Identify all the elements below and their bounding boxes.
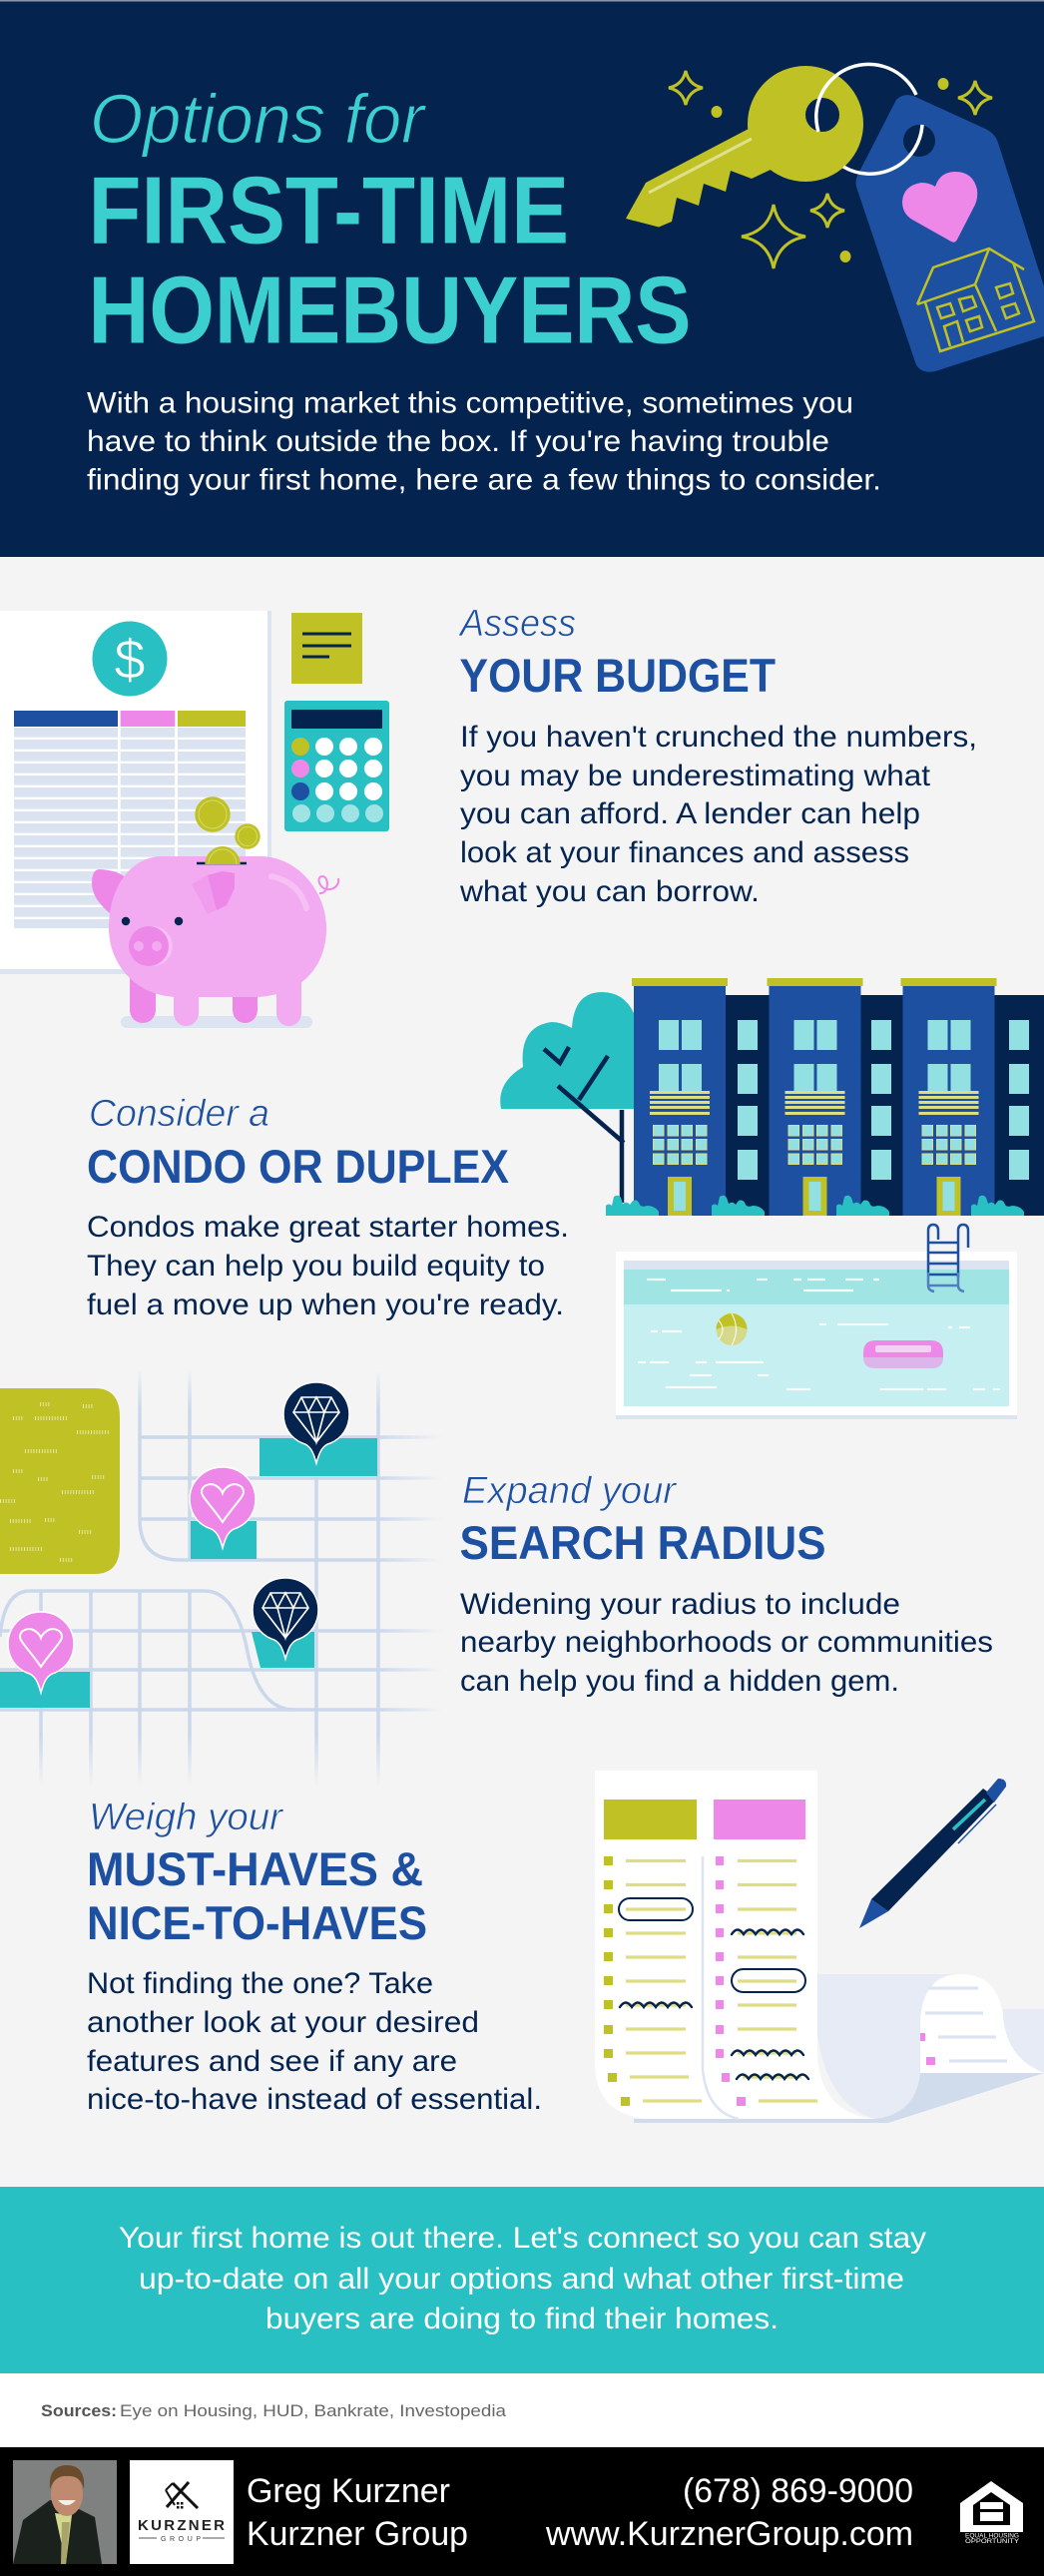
icon: key	[626, 66, 863, 228]
illustration: pool	[616, 1225, 1017, 1419]
sources text: Eye on Housing, HUD, Bankrate, Investopedia	[120, 2401, 507, 2420]
title: options for: Options for	[90, 80, 427, 158]
intro text	[87, 387, 881, 497]
heading: your budget: YOUR BUDGET	[459, 649, 776, 702]
icon: pen	[859, 1779, 1006, 1928]
body text: search: can help you find a hidden gem.	[460, 1665, 899, 1698]
body text: must-haves: features and see if any are	[87, 2045, 457, 2078]
icon: pool float	[863, 1340, 943, 1368]
agent name: Kurzner Group	[247, 2515, 468, 2553]
agent name	[247, 2472, 468, 2553]
icon: key ring	[816, 64, 922, 174]
body text: budget: look at your finances and assess	[460, 836, 909, 869]
illustration: neighborhood map	[0, 1370, 444, 1787]
icon: tree	[500, 992, 634, 1203]
icon: ladder	[928, 1225, 968, 1291]
curled page lines	[920, 1988, 1007, 2065]
body text: budget: If you haven't crunched the numbers,	[460, 721, 977, 754]
bushes	[606, 1196, 1024, 1216]
call to action text: up-to-date on all your options and what other first-time	[139, 2263, 904, 2296]
agent name: Greg Kurzner	[247, 2472, 450, 2510]
body text: must-haves: Not finding the one? Take	[87, 1967, 433, 2000]
heading: condo or duplex: CONDO OR DUPLEX	[87, 1140, 509, 1193]
body text: budget: you can afford. A lender can help	[460, 797, 920, 830]
map: park block	[0, 1388, 120, 1574]
icon: pin with diamond	[253, 1578, 318, 1659]
heading: expand your: Expand your	[462, 1470, 677, 1512]
logo mark	[166, 2482, 198, 2509]
icon: equal housing opportunity	[960, 2481, 1023, 2545]
heading: must-haves: MUST-HAVES &	[87, 1842, 423, 1895]
body text: must-haves	[87, 1967, 542, 2116]
illustration: budget sheet	[0, 611, 271, 974]
illustration: condo building	[500, 978, 1044, 1216]
title: first-time: FIRST-TIME	[88, 158, 569, 263]
body text: budget	[459, 721, 977, 908]
ripples	[638, 1280, 1000, 1389]
call to action text	[119, 2222, 926, 2335]
heading: consider a: Consider a	[89, 1093, 269, 1135]
heading: weigh your: Weigh your	[89, 1797, 283, 1838]
panel: call to action	[0, 2187, 1044, 2373]
heading: nice-to-haves: NICE-TO-HAVES	[87, 1896, 427, 1949]
agent contact: (678) 869-9000	[683, 2472, 913, 2510]
title: homebuyers: HOMEBUYERS	[88, 258, 691, 363]
body text: condo: Condos make great starter homes.	[87, 1211, 569, 1244]
intro text: have to think outside the box. If you're having trouble	[87, 425, 829, 458]
agent photo	[13, 2460, 117, 2564]
list: nice-to-haves	[716, 1856, 817, 2106]
intro text: finding your first home, here are a few things to consider.	[87, 463, 881, 497]
list: must-haves	[604, 1856, 702, 2106]
body text: condo: fuel a move up when you're ready.	[87, 1288, 564, 1321]
panel: assess your budget	[0, 603, 977, 1028]
heading: search radius: SEARCH RADIUS	[459, 1516, 826, 1569]
body text: search	[460, 1588, 993, 1698]
company logo: GROUP	[161, 2536, 201, 2543]
body text: condo: They can help you build equity to	[87, 1250, 545, 1283]
icon: tag with heart and house	[856, 95, 1044, 372]
body text: must-haves: nice-to-have instead of essential.	[87, 2083, 542, 2116]
body text: must-haves: another look at your desired	[87, 2006, 479, 2039]
icon: calculator	[284, 701, 389, 831]
agent contact	[545, 2472, 913, 2553]
icon: piggy bank	[92, 796, 338, 1028]
panel: agent footer	[0, 2447, 1044, 2576]
map: roads	[0, 1370, 444, 1787]
icon: sticky note	[291, 613, 362, 684]
icon: dollar coin: $	[114, 628, 146, 691]
icon: dollar coin	[92, 621, 168, 697]
intro text: With a housing market this competitive, sometimes you	[87, 387, 853, 419]
company logo: KURZNER	[138, 2517, 225, 2534]
heading: assess: Assess	[458, 603, 576, 645]
map: highlighted lots	[0, 1438, 377, 1708]
panel: weigh your must-haves	[87, 1771, 1044, 2123]
panel: sources	[0, 2373, 1044, 2447]
panel: header	[0, 0, 1044, 557]
call to action text: buyers are doing to find their homes.	[265, 2303, 779, 2335]
body text: budget: you may be underestimating what	[460, 760, 931, 792]
icon: pin with heart	[190, 1467, 256, 1548]
icon: pin with heart	[8, 1612, 74, 1693]
agent contact: www.KurznerGroup.com	[545, 2515, 913, 2553]
call to action text: Your first home is out there. Let's connect so you can stay	[119, 2222, 926, 2255]
body text: search: nearby neighborhoods or communities	[460, 1626, 993, 1659]
body text: budget: what you can borrow.	[459, 875, 760, 908]
panel: expand your search radius	[0, 1370, 993, 1787]
icon: sparkles	[669, 71, 992, 268]
icon: pin with diamond	[283, 1382, 349, 1463]
icon: equal housing opportunity: OPPORTUNITY	[965, 2538, 1020, 2545]
illustration: checklist scroll	[595, 1771, 1044, 2123]
icon: equal housing opportunity: EQUAL HOUSING	[965, 2533, 1019, 2539]
body text: search: Widening your radius to include	[460, 1588, 900, 1621]
panel: condo or duplex	[87, 978, 1044, 1419]
icon: beach ball	[717, 1313, 747, 1345]
company logo	[130, 2460, 234, 2564]
body text: condo	[87, 1211, 569, 1321]
sources text: Sources:	[41, 2401, 117, 2420]
table	[14, 711, 246, 928]
